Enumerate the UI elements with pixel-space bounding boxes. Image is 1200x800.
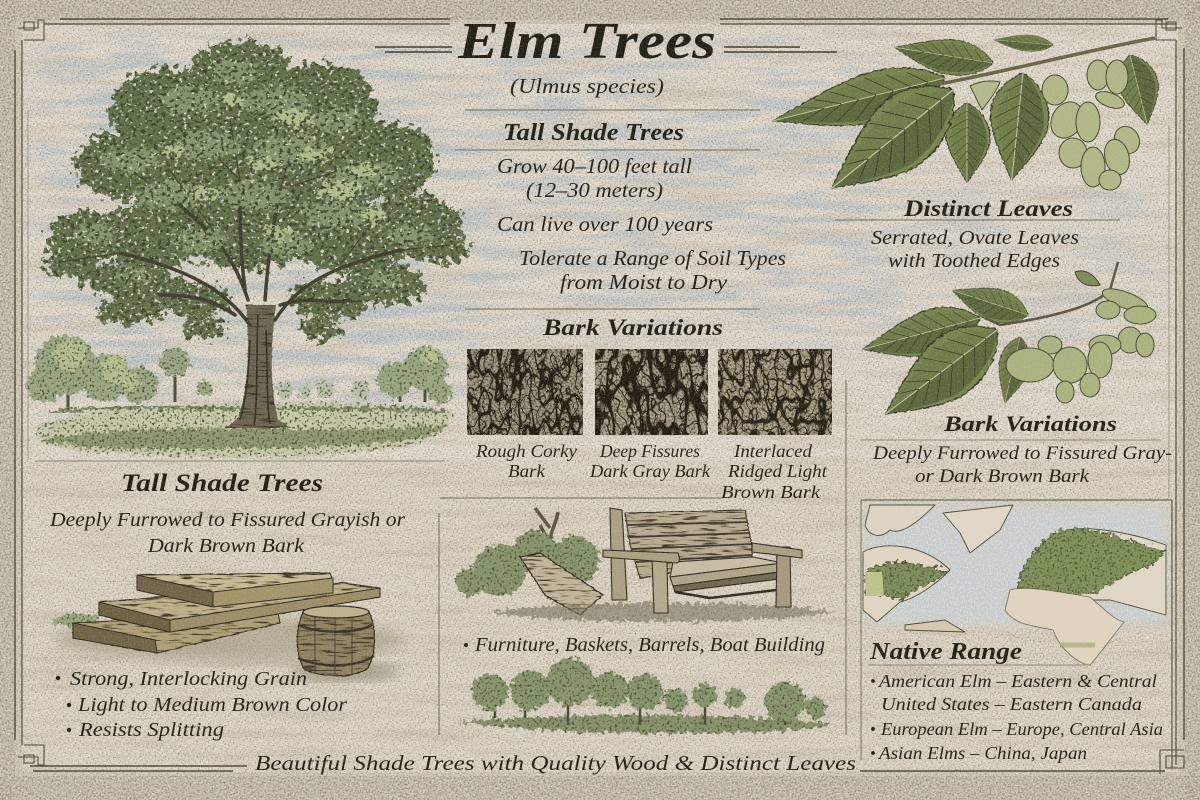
illustration: upper leaf branch (767, 31, 1167, 217)
range list: Asian Elms – China, Japan (878, 743, 1087, 763)
facts text (497, 154, 786, 294)
right bark description: Deeply Furrowed to Fissured Gray- (872, 443, 1172, 464)
heading: wood section: Tall Shade Trees (121, 470, 323, 497)
bark captions: Dark Gray Bark (589, 461, 711, 481)
subtitle: (Ulmus species) (510, 74, 664, 98)
uses text: Furniture, Baskets, Barrels, Boat Building (474, 634, 825, 656)
footer tagline: Beautiful Shade Trees with Quality Wood & Distinct Leaves (255, 751, 856, 775)
panel: wood uses (456, 508, 838, 734)
world map (861, 500, 1172, 768)
heading: tall shade trees: Tall Shade Trees (503, 120, 684, 146)
facts text: from Moist to Dry (560, 270, 728, 294)
wood description (49, 509, 405, 557)
leaf description (871, 227, 1079, 272)
bark swatch: rough corky (467, 349, 583, 435)
wood property bullets: Resists Splitting (78, 719, 224, 741)
section: elm facts (375, 13, 837, 309)
title flourishes (375, 47, 837, 52)
illustration: stacked lumber (52, 573, 405, 662)
facts text: (12–30 meters) (526, 178, 663, 202)
illustration: rustic bench (490, 508, 838, 622)
facts text: Tolerate a Range of Soil Types (519, 246, 786, 270)
illustration: lower leaf branch with samaras (857, 262, 1156, 439)
bark swatch: deep fissures (595, 349, 708, 435)
wood property bullets (56, 668, 347, 741)
leaf description: with Toothed Edges (888, 250, 1060, 272)
canopy base layer (42, 40, 470, 340)
illustration: shrub and stump (456, 508, 599, 604)
illustration: split log (520, 553, 603, 615)
heading: distinct leaves: Distinct Leaves (903, 196, 1073, 221)
title: Elm Trees (457, 13, 716, 70)
panel: distinct leaves (767, 31, 1172, 487)
range list (871, 671, 1163, 763)
wood property bullets: Light to Medium Brown Color (77, 694, 347, 716)
bark captions: Deep Fissures (599, 441, 700, 461)
bark captions (475, 441, 828, 502)
bark captions: Bark (508, 461, 546, 481)
range list: United States – Eastern Canada (881, 694, 1142, 714)
canopy light layer (158, 94, 389, 238)
panel: native range (861, 500, 1172, 768)
heading: bark variations: Bark Variations (542, 315, 723, 340)
facts text: Grow 40–100 feet tall (497, 154, 692, 178)
distant shrubs and tree line (27, 335, 452, 412)
range list: American Elm – Eastern & Central (878, 671, 1157, 691)
illustration: row of elm trees (458, 658, 832, 734)
right bark description (872, 443, 1172, 487)
bark captions: Rough Corky (475, 441, 577, 461)
illustration: barrel (290, 606, 400, 681)
heading: bark variations right: Bark Variations (943, 411, 1117, 436)
bark captions: Brown Bark (721, 482, 821, 502)
leaf description: Serrated, Ovate Leaves (871, 227, 1079, 249)
wood description: Deeply Furrowed to Fissured Grayish or (49, 509, 405, 531)
panel: big elm tree scene (27, 40, 470, 457)
heading: native range: Native Range (869, 639, 1022, 665)
facts text: Can live over 100 years (497, 212, 713, 236)
bark captions: Ridged Light (727, 461, 828, 481)
panel: wood properties (35, 461, 445, 741)
bark captions: Interlaced (733, 441, 812, 461)
range list: European Elm – Europe, Central Asia (880, 719, 1163, 739)
meadow ground (37, 402, 451, 457)
canopy mid layer (73, 60, 434, 288)
trunk and main branches (60, 120, 450, 428)
wood property bullets: Strong, Interlocking Grain (70, 668, 307, 690)
right bark description: or Dark Brown Bark (915, 466, 1090, 487)
panel: bark variations (467, 315, 832, 502)
wood description: Dark Brown Bark (147, 535, 305, 557)
bark swatch: interlaced ridged (718, 349, 832, 435)
